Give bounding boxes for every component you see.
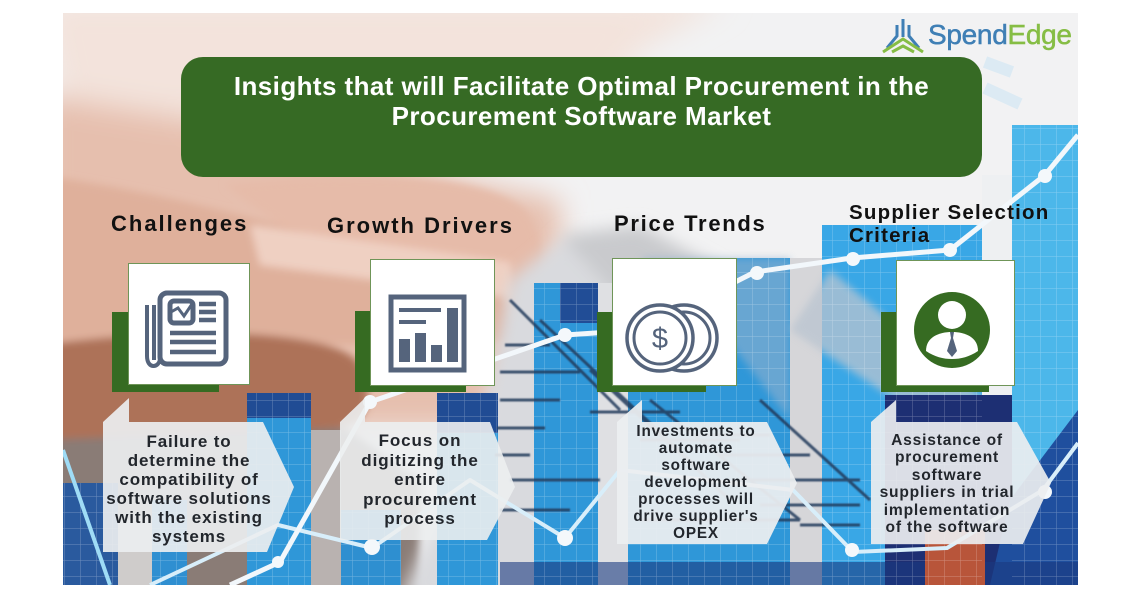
callout text: growth drivers: procurement [363,490,477,508]
callout: price trends [617,400,797,544]
callout text: price trends: software [661,457,731,474]
heading: challenges: Challenges [111,211,248,236]
callout text: price trends: Investments to [636,423,756,440]
callout text: supplier selection: procurement [895,449,999,466]
callout text: challenges [106,432,272,546]
callout text: growth drivers: process [384,509,456,528]
heading: supplier selection criteria [849,201,1049,247]
card: price trends icon [597,258,737,392]
callout text: challenges: with the existing [115,508,263,527]
icon: coins: $ [652,323,668,355]
icon: newspaper [145,290,228,368]
callout text: supplier selection: implementation [884,502,1010,519]
logo wordmark: SpendEdge [928,19,1072,50]
title banner [181,57,982,177]
heading: price trends: Price Trends [614,211,766,236]
keyboard keys [495,300,870,525]
callout text: challenges: software solutions [106,489,272,508]
callout: challenges [103,398,294,552]
callout text: challenges: compatibility of [119,470,259,489]
callout text: price trends: drive supplier's [633,508,759,525]
callout: growth drivers [340,398,515,540]
callout text: supplier selection: suppliers in trial [880,484,1014,501]
card: challenges icon [112,263,250,392]
light decoration top right [985,62,1020,104]
title banner: Insights that will Facilitate Optimal Procurement in the [234,71,929,101]
callout text: supplier selection: Assistance of [891,432,1003,449]
callout text: growth drivers: digitizing the [361,450,479,470]
callout text: supplier selection: of the software [886,519,1008,536]
callout text: price trends: development [644,474,748,491]
heading: growth drivers: Growth Drivers [327,213,514,238]
callout text: supplier selection: software [912,467,982,484]
chart bars [63,125,1078,585]
callout text: challenges: Failure to [146,432,232,451]
card: growth drivers icon [355,259,495,392]
callout: supplier selection [871,400,1051,544]
card: supplier icon [881,260,1015,392]
title banner: Procurement Software Market [392,101,771,131]
logo: SpendEdge [882,19,1072,54]
callout text: growth drivers [361,431,479,528]
callout text: price trends [633,423,759,542]
callout text: price trends: OPEX [673,525,719,542]
callout text: price trends: automate [659,440,733,457]
icon: person with tie [914,292,990,368]
line charts [63,135,1078,585]
icon: coins [625,303,719,373]
photo [63,13,704,422]
icon: logo mark [882,19,924,54]
callout text: challenges: systems [152,527,226,546]
heading: supplier selection criteria: Supplier Selection [849,201,1049,224]
icon: bar report [388,294,466,372]
heading: supplier selection criteria: Criteria [849,224,930,247]
callout text: growth drivers: Focus on [379,431,461,450]
callout text: price trends: processes will [638,491,754,508]
callout text: challenges: determine the [128,451,250,470]
callout text: supplier selection [880,432,1014,536]
callout text: growth drivers: entire [394,470,446,489]
